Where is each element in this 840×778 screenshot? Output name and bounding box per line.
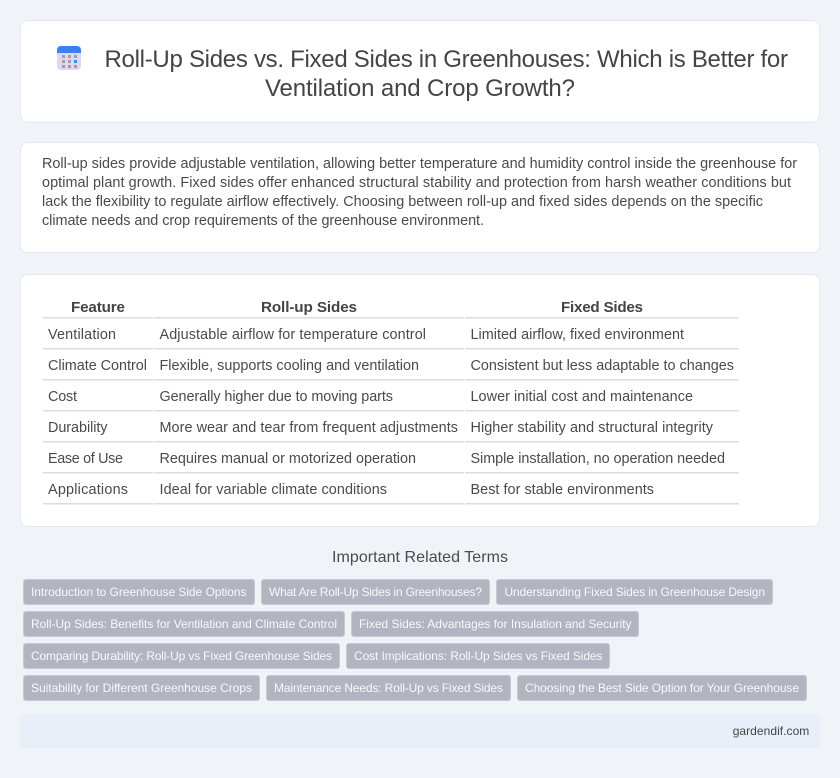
tag: Understanding Fixed Sides in Greenhouse Design xyxy=(504,585,765,599)
tag: What Are Roll-Up Sides in Greenhouses? xyxy=(269,585,482,599)
tag xyxy=(346,644,610,668)
tag: Choosing the Best Side Option for Your Greenhouse xyxy=(525,681,799,695)
tag list: related terms xyxy=(24,580,806,700)
tag: Suitability for Different Greenhouse Crops xyxy=(31,681,252,695)
tag: Cost Implications: Roll-Up Sides vs Fixed Sides xyxy=(354,649,602,663)
tag xyxy=(24,612,344,636)
row: cost: Lower initial cost and maintenance xyxy=(470,389,693,405)
row: ventilation: Adjustable airflow for temperature control xyxy=(160,327,426,343)
row: cost: Generally higher due to moving parts xyxy=(160,389,393,405)
row: ease of use: Ease of Use xyxy=(48,451,123,467)
title: Ventilation and Crop Growth? xyxy=(265,75,575,102)
row: durability: Durability xyxy=(48,420,108,436)
title: Roll-Up Sides vs. Fixed Sides in Greenhouses: Which is Better for xyxy=(104,46,788,73)
tag xyxy=(262,580,490,604)
row: cost xyxy=(48,389,693,405)
row: durability: Higher stability and structural integrity xyxy=(470,420,714,436)
row: applications: Ideal for variable climate conditions xyxy=(160,482,387,498)
row: cost: Cost xyxy=(48,389,77,405)
row: climate control xyxy=(48,358,734,374)
tag: Introduction to Greenhouse Side Options xyxy=(31,585,246,599)
row: climate control: Consistent but less adaptable to changes xyxy=(470,358,734,374)
tag xyxy=(24,676,260,700)
text block: summary: Roll-up sides provide adjustable ventilation, allowing better temperature and humidity control inside the greenhouse for xyxy=(42,156,797,172)
text block: summary: climate needs and crop requirements of the greenhouse environment. xyxy=(42,213,484,229)
row: ease of use: Simple installation, no operation needed xyxy=(470,451,725,467)
row: ventilation: Ventilation xyxy=(48,327,116,343)
row: ventilation xyxy=(48,327,684,343)
tag: Comparing Durability: Roll-Up vs Fixed Greenhouse Sides xyxy=(31,649,332,663)
table header xyxy=(71,299,643,316)
row: ease of use: Requires manual or motorized operation xyxy=(160,451,416,467)
row: applications: Applications xyxy=(48,482,128,498)
row: durability: More wear and tear from frequent adjustments xyxy=(160,420,458,436)
tag: Maintenance Needs: Roll-Up vs Fixed Sides xyxy=(274,681,503,695)
row: climate control: Flexible, supports cooling and ventilation xyxy=(160,358,419,374)
tag: Roll-Up Sides: Benefits for Ventilation and Climate Control xyxy=(31,617,337,631)
footer: gardendif.com xyxy=(733,724,809,738)
text block: summary: optimal plant growth. Fixed sides offer enhanced structural stability and protection from harsh weather conditions but xyxy=(42,175,791,191)
panel: comparison table xyxy=(20,274,820,526)
table header: Feature xyxy=(71,299,125,316)
text block: summary: lack the flexibility to regulate airflow effectively. Choosing between roll-up and fixed sides depends on the specific xyxy=(42,194,763,210)
tag xyxy=(266,676,510,700)
tag: Fixed Sides: Advantages for Insulation and Security xyxy=(359,617,632,631)
panel: summary paragraph xyxy=(20,142,820,252)
heading: important related terms: Important Related Terms xyxy=(332,549,508,566)
row: ventilation: Limited airflow, fixed environment xyxy=(470,327,684,343)
footer xyxy=(20,714,820,748)
row: applications: Best for stable environments xyxy=(470,482,654,498)
tag xyxy=(518,676,806,700)
row: durability xyxy=(48,420,714,436)
text block: summary xyxy=(42,156,797,229)
panel: title header xyxy=(20,20,820,122)
icon: calendar xyxy=(57,46,81,70)
row: climate control: Climate Control xyxy=(48,358,147,374)
tag xyxy=(496,580,772,604)
tag xyxy=(24,644,340,668)
tag xyxy=(24,580,254,604)
tag xyxy=(352,612,638,636)
row: ease of use xyxy=(48,451,725,467)
table header: Fixed Sides xyxy=(561,299,643,316)
row: applications xyxy=(48,482,654,498)
table header: Roll-up Sides xyxy=(261,299,357,316)
title xyxy=(104,46,788,102)
